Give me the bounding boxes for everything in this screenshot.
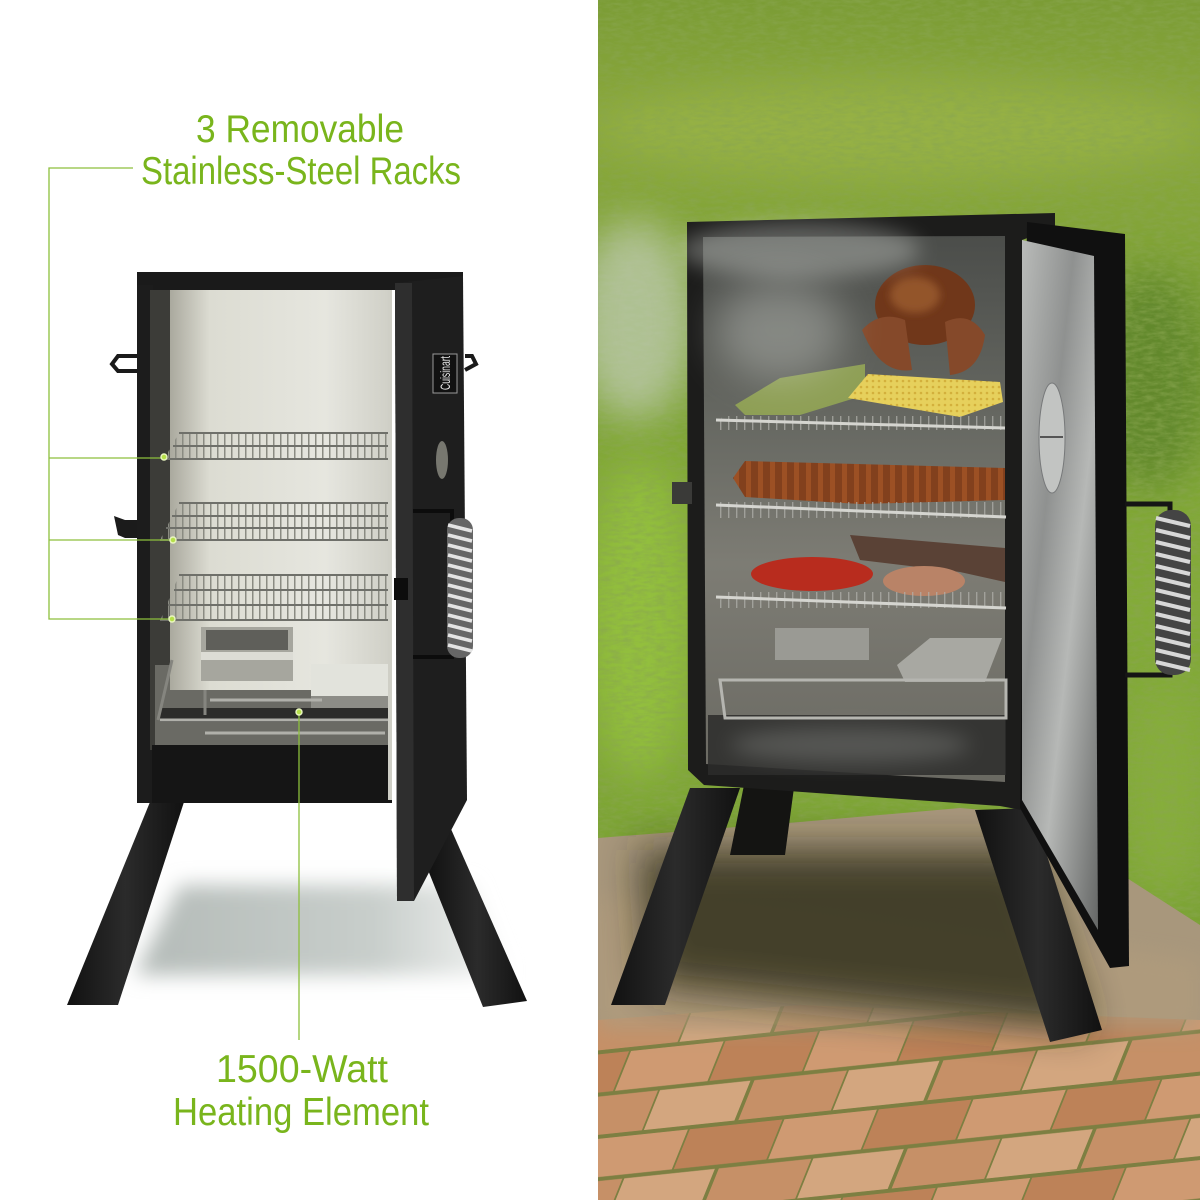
- brisket and sausage: [751, 535, 1005, 596]
- heading: racks callout: Stainless-Steel Racks: [141, 150, 461, 193]
- heading: heating element callout: Heating Element: [173, 1091, 429, 1134]
- open door: [1020, 222, 1129, 968]
- heading: racks callout: 3 Removable: [196, 108, 404, 151]
- door thermometer: [1039, 383, 1065, 493]
- top rack: [716, 416, 1005, 430]
- smoke inside cabinet: [680, 222, 970, 763]
- vent: [672, 482, 692, 504]
- callout lines: racks: [49, 168, 173, 619]
- corn: [848, 374, 1003, 417]
- panel: outdoor lifestyle photo: [575, 0, 1200, 1200]
- pans: [720, 628, 1006, 718]
- coil handle: [1125, 504, 1191, 675]
- rear leg: [730, 788, 794, 855]
- smoker: open with empty racks: [67, 272, 527, 1007]
- water pan: [201, 627, 293, 681]
- callout dots: racks: [161, 454, 176, 622]
- patio: [598, 808, 1200, 1200]
- callout dot: heating element: [296, 709, 302, 715]
- panel: product diagram background: [0, 0, 598, 1200]
- brand plate: Cuisinart: [437, 356, 453, 390]
- roast chicken: [862, 265, 985, 375]
- coil handle: [413, 511, 473, 658]
- ribs: [733, 461, 1005, 504]
- lawn: [590, 0, 1200, 1000]
- wood tray: [311, 664, 390, 719]
- heading: heating element callout: [173, 1048, 429, 1134]
- callout line: heating element: [298, 712, 300, 1040]
- smoker cabinet: [687, 213, 1055, 810]
- smoke plume: [575, 220, 695, 420]
- middle rack: [716, 502, 1006, 518]
- rack 1: [164, 433, 388, 459]
- floor shadow: [135, 885, 505, 975]
- vent knob: [114, 516, 137, 538]
- right side handle: [465, 356, 476, 370]
- cabinet body: [137, 272, 463, 803]
- front left leg: [611, 788, 740, 1005]
- door: [388, 276, 473, 901]
- rack 3: [160, 575, 391, 621]
- brand plate: [433, 354, 457, 393]
- bottom rack: [716, 592, 1006, 608]
- heading: heating element callout: 1500-Watt: [216, 1048, 388, 1091]
- front right leg: [975, 808, 1102, 1042]
- green vegetables: [735, 364, 865, 415]
- rack 2: [160, 503, 390, 540]
- thermometer: [436, 441, 448, 479]
- cast shadow: [640, 850, 1090, 1030]
- legs: [67, 802, 527, 1007]
- heating element rack: [158, 660, 390, 733]
- heading: racks callout: [141, 108, 461, 193]
- handle left: [112, 356, 137, 371]
